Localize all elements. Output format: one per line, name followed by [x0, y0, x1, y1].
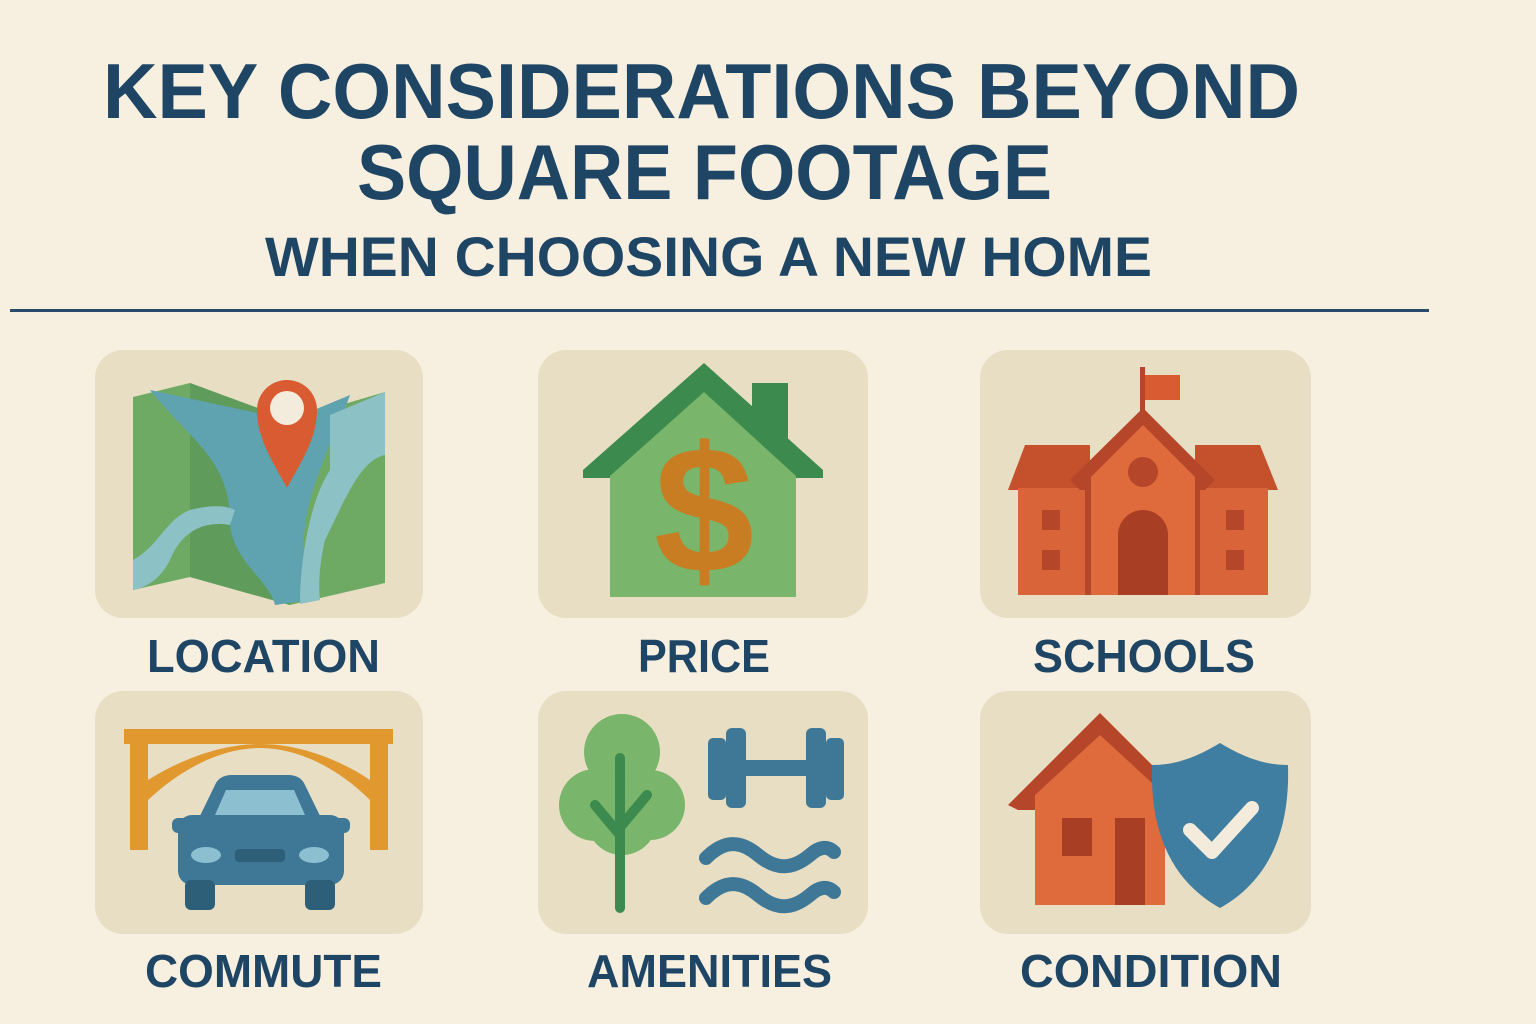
icon: house with dollar — [583, 363, 823, 611]
title: SQUARE FOOTAGE — [357, 128, 1052, 216]
icon: bridge and car — [124, 729, 393, 910]
icon: pin — [257, 380, 317, 488]
icon: waves — [706, 844, 834, 906]
label: price: PRICE — [638, 630, 770, 682]
label: condition: CONDITION — [1020, 945, 1282, 997]
panel: price — [538, 350, 868, 682]
label: location: LOCATION — [147, 630, 380, 682]
panel: amenities — [538, 691, 868, 997]
panel: commute — [95, 691, 423, 997]
subtitle: WHEN CHOOSING A NEW HOME — [265, 225, 1152, 288]
icon: dumbbell — [708, 728, 844, 808]
panel: schools — [980, 350, 1311, 682]
label: commute: COMMUTE — [145, 945, 382, 997]
icon: tree — [559, 714, 685, 908]
label: amenities: AMENITIES — [587, 945, 832, 997]
icon: house with dollar: $ — [654, 410, 754, 611]
icon: map — [133, 380, 385, 605]
icon: house — [1008, 713, 1192, 905]
label: schools: SCHOOLS — [1033, 630, 1255, 682]
icon: school — [1008, 367, 1278, 595]
title: KEY CONSIDERATIONS BEYOND — [103, 47, 1300, 135]
title — [103, 47, 1300, 216]
panel: condition — [980, 691, 1311, 997]
icon: shield with check — [1152, 743, 1288, 908]
panel: location — [95, 350, 423, 682]
